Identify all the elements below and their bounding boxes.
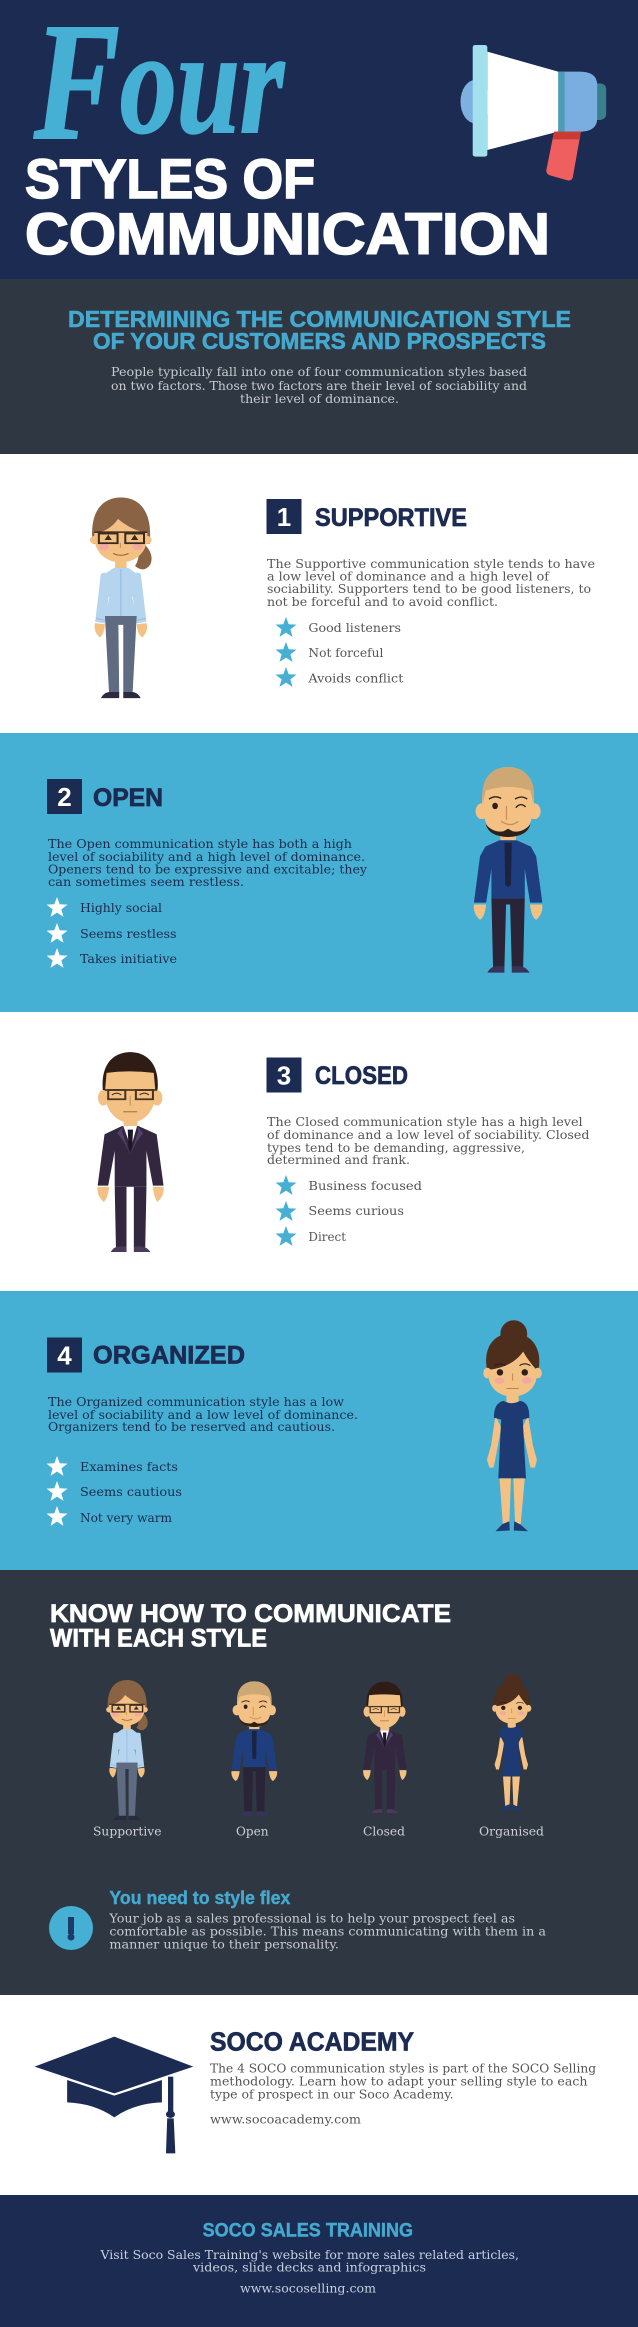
footer text: Visit Soco Sales Training's website for more sales related articles,: [100, 2247, 519, 2262]
academy text: type of prospect in our Soco Academy.: [210, 2086, 454, 2102]
heading: supportive: SUPPORTIVE: [315, 504, 467, 532]
title: styles of: STYLES OF: [25, 147, 315, 210]
number badge 1: 1: [277, 502, 291, 532]
footer text: www.socoselling.com: [240, 2280, 376, 2296]
description: [48, 836, 368, 889]
bullet list: Business focused: [308, 1178, 422, 1193]
icon: megaphone: [460, 45, 606, 180]
panel: 3 closed: [0, 1012, 638, 1291]
intro text: [111, 364, 527, 406]
panel: soco academy: [0, 1995, 638, 2195]
bullet list: Direct: [308, 1229, 346, 1244]
bullet list: [46, 1456, 182, 1526]
description: Openers tend to be expressive and excitable; they: [48, 862, 368, 876]
bullet list: Good listeners: [308, 620, 401, 635]
icon: exclamation: [49, 1906, 93, 1950]
figure: small organised: [492, 1674, 531, 1811]
academy text: methodology. Learn how to adapt your selling style to each: [210, 2074, 588, 2088]
description: [48, 1394, 358, 1434]
heading: closed: CLOSED: [315, 1062, 408, 1090]
intro text: on two factors. Those two factors are their level of sociability and: [111, 378, 527, 393]
figure labels: [93, 1824, 544, 1838]
number badge 3: 3: [277, 1060, 291, 1090]
figure: small supportive: [106, 1680, 148, 1820]
panel: 2 open: [0, 733, 638, 1012]
description: The Closed communication style has a high level: [267, 1114, 583, 1129]
description: The Open communication style has both a high: [48, 836, 352, 851]
panel: know how to communicate: [0, 1570, 638, 1995]
figure labels: Closed: [363, 1824, 405, 1838]
description: can sometimes seem restless.: [48, 874, 244, 889]
figure: open man: [474, 767, 542, 973]
heading: know how: [50, 1600, 451, 1652]
description: sociability. Supporters tend to be good listeners, to: [267, 581, 591, 596]
bullet list: Seems curious: [308, 1203, 404, 1218]
figure: organized woman: [483, 1320, 542, 1531]
figure labels: Open: [236, 1824, 268, 1838]
panel: footer: [0, 2195, 638, 2327]
description: The Supportive communication style tends to have: [267, 556, 595, 571]
icon: graduation cap: [35, 2037, 193, 2153]
number badge 4: [47, 1338, 82, 1372]
number badge 4: 4: [57, 1340, 72, 1370]
figure: small closed: [363, 1682, 406, 1813]
description: not be forceful and to avoid conflict.: [267, 594, 498, 609]
bullet list: [276, 1175, 422, 1246]
intro heading: [68, 306, 571, 354]
title: Four: our: [120, 1, 285, 165]
intro heading: DETERMINING THE COMMUNICATION STYLE: [68, 306, 571, 332]
description: determined and frank.: [267, 1152, 410, 1167]
bullet list: [46, 897, 177, 968]
heading: organized: ORGANIZED: [93, 1342, 245, 1370]
figure labels: Organised: [479, 1824, 544, 1838]
description: of dominance and a low level of sociability. Closed: [267, 1127, 590, 1142]
academy text: www.socoacademy.com: [210, 2112, 361, 2126]
academy text: The 4 SOCO communication styles is part of the SOCO Selling: [210, 2060, 596, 2076]
bullet list: Not very warm: [80, 1510, 172, 1525]
description: types tend to be demanding, aggressive,: [267, 1140, 525, 1155]
title: communication: COMMUNICATION: [25, 202, 550, 267]
heading: open: OPEN: [93, 784, 163, 812]
bullet list: Avoids conflict: [307, 670, 403, 686]
description: Organizers tend to be reserved and cautious.: [48, 1419, 335, 1434]
number badge 2: 2: [57, 782, 72, 812]
description: a low level of dominance and a high level of: [267, 568, 550, 584]
heading: soco sales training: SOCO SALES TRAINING: [203, 2220, 413, 2242]
callout text: comfortable as possible. This means communicating with them in a: [109, 1924, 547, 1938]
callout heading: You need to style flex: [109, 1888, 290, 1908]
figure: closed man: [97, 1052, 164, 1252]
bullet list: Seems cautious: [80, 1484, 182, 1499]
heading: know how: WITH EACH STYLE: [50, 1624, 267, 1652]
number badge 1: [266, 499, 302, 534]
footer text: [100, 2247, 519, 2296]
bullet list: Examines facts: [80, 1459, 178, 1474]
panel: 1 supportive: [0, 454, 638, 733]
footer text: videos, slide decks and infographics: [192, 2260, 426, 2274]
panel: intro: [0, 279, 638, 454]
callout text: Your job as a sales professional is to help your prospect feel as: [108, 1910, 515, 1926]
panel: header: [0, 0, 638, 279]
description: [267, 1114, 590, 1167]
intro heading: OF YOUR CUSTOMERS AND PROSPECTS: [93, 328, 546, 354]
bullet list: Seems restless: [80, 926, 177, 941]
heading: know how: KNOW HOW TO COMMUNICATE: [50, 1600, 451, 1628]
bullet list: [276, 617, 403, 687]
bullet list: Highly social: [80, 900, 162, 915]
bullet list: Not forceful: [308, 645, 383, 660]
academy text: [210, 2060, 596, 2126]
intro text: People typically fall into one of four communication styles based: [111, 364, 527, 379]
description: [267, 556, 595, 609]
callout text: [108, 1910, 547, 1952]
description: The Organized communication style has a low: [48, 1394, 344, 1409]
description: level of sociability and a high level of dominance.: [48, 849, 365, 864]
description: level of sociability and a low level of dominance.: [48, 1407, 358, 1422]
figure: small open: [231, 1681, 277, 1816]
callout text: manner unique to their personality.: [109, 1936, 339, 1952]
number badge 3: [266, 1058, 302, 1092]
heading: soco academy: SOCO ACADEMY: [210, 2026, 414, 2056]
number badge 2: [47, 779, 82, 814]
panel: 4 organized: [0, 1291, 638, 1570]
figure: supportive woman: [90, 497, 152, 698]
intro text: their level of dominance.: [240, 391, 399, 406]
bullet list: Takes initiative: [80, 951, 177, 966]
figure labels: Supportive: [93, 1824, 162, 1838]
